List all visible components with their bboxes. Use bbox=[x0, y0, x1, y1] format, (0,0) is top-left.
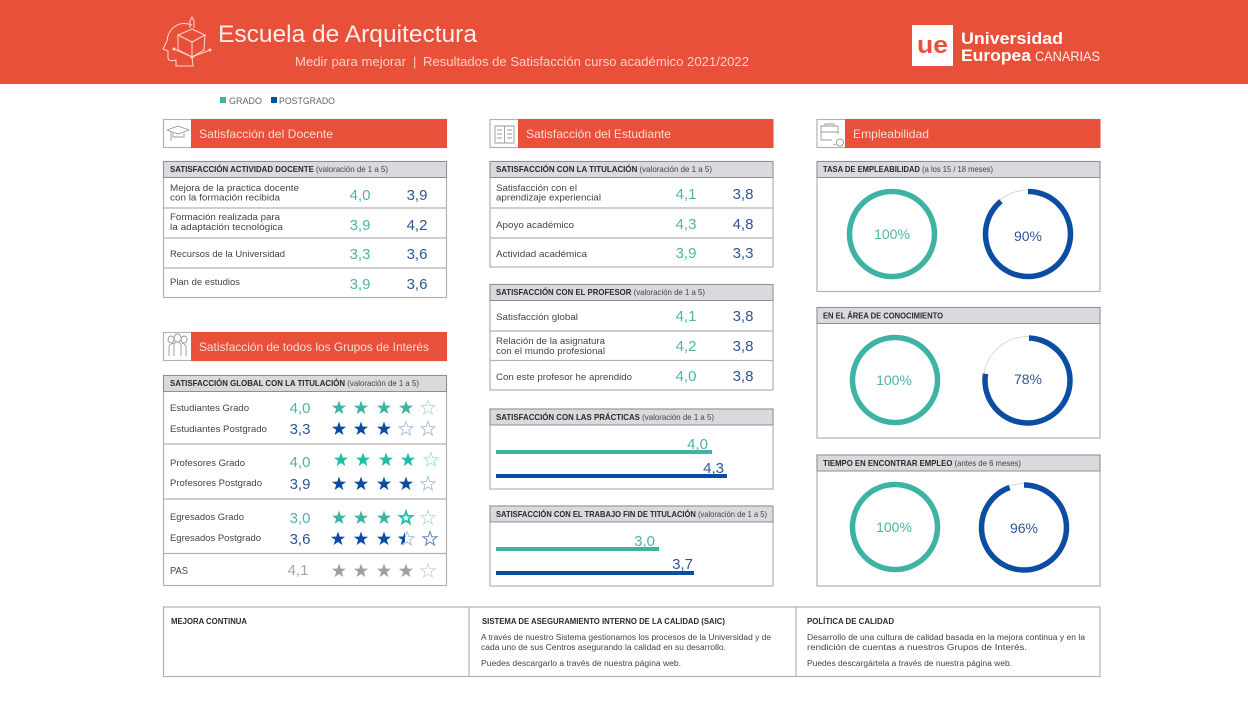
donut: 96% postgrado bbox=[980, 484, 1068, 572]
row: Profesores Grado bbox=[170, 452, 438, 471]
table: satisfacción actividad docente: con la formación recibida bbox=[170, 192, 281, 204]
donut: 90% postgrado bbox=[984, 190, 1072, 278]
subtitle: Resultados de Satisfacción curso académico 2021/2022 bbox=[423, 54, 749, 69]
row: Estudiantes Grado bbox=[170, 400, 435, 417]
row: Profesores Postgrado bbox=[170, 476, 435, 493]
table: satisfacción con el profesor bbox=[490, 284, 773, 390]
icon: briefcase with magnifier bbox=[821, 124, 843, 146]
donut: 100% grado: 100% bbox=[874, 226, 910, 242]
icon: head with cube bbox=[163, 17, 211, 66]
table: satisfacción con el profesor: 3,8 bbox=[733, 368, 753, 385]
panel heading: Empleabilidad bbox=[817, 119, 1100, 148]
table: satisfacción actividad docente: 4,0 bbox=[350, 187, 370, 204]
table: satisfacción con la titulación: 4,8 bbox=[733, 216, 753, 233]
logo: Universidad Europea Canarias: ue bbox=[917, 32, 948, 59]
panel heading: Satisfacción del Docente: Satisfacción del Docente bbox=[199, 127, 333, 141]
subtitle: Medir para mejorar bbox=[295, 54, 407, 69]
row: Estudiantes Postgrado: Estudiantes Postgrado bbox=[170, 424, 267, 435]
table: satisfacción con el profesor: 4,0 bbox=[676, 368, 696, 385]
table: satisfacción actividad docente: 3,9 bbox=[407, 187, 427, 204]
block: política de calidad: rendición de cuentas a nuestros Grupos de Interés. bbox=[807, 643, 1027, 652]
table: satisfacción actividad docente: Mejora de la practica docente bbox=[170, 183, 299, 194]
header banner bbox=[0, 0, 1248, 84]
subtitle: | bbox=[413, 54, 416, 69]
panel: tiempo en encontrar empleo bbox=[817, 455, 1100, 586]
panel: en el área de conocimiento: EN EL ÁREA DE CONOCIMIENTO bbox=[823, 310, 943, 320]
table: satisfacción actividad docente: Recursos de la Universidad bbox=[170, 249, 285, 260]
panel: tasa de empleabilidad: TASA DE EMPLEABILIDAD (a los 15 / 18 meses) bbox=[823, 164, 993, 174]
legend: POSTGRADO bbox=[279, 96, 335, 106]
table: satisfacción con el profesor: 4,2 bbox=[676, 338, 696, 355]
row: Profesores Grado: 4,0 bbox=[290, 454, 310, 471]
table: satisfacción actividad docente: Plan de estudios bbox=[170, 277, 240, 288]
block: sistema de aseguramiento interno: cada uno de sus Centros asegurando la calidad en su desarrollo. bbox=[481, 643, 726, 652]
chart: satisfacción con las prácticas: 4,3 bbox=[703, 460, 724, 477]
table: satisfacción actividad docente: 3,6 bbox=[407, 276, 427, 293]
logo: Universidad Europea Canarias: Europea bbox=[961, 46, 1032, 65]
chart: satisfacción con el trabajo fin de titulación: 3,0 bbox=[634, 533, 655, 550]
row: Profesores Postgrado: 3,9 bbox=[290, 476, 310, 493]
row: Egresados Grado: Egresados Grado bbox=[170, 512, 244, 523]
donut: 100% grado: 100% bbox=[876, 519, 912, 535]
panel: tasa de empleabilidad bbox=[817, 162, 1100, 292]
row: Egresados Grado: 3,0 bbox=[290, 510, 310, 527]
title: Escuela de Arquitectura bbox=[218, 21, 478, 48]
block: sistema de aseguramiento interno: SISTEMA DE ASEGURAMIENTO INTERNO DE LA CALIDAD (SAIC) bbox=[482, 617, 725, 626]
chart: satisfacción con el trabajo fin de titulación bbox=[490, 506, 773, 586]
logo: Universidad Europea Canarias: CANARIAS bbox=[1035, 48, 1100, 64]
footer panel bbox=[164, 607, 1100, 676]
table: satisfacción con el profesor: con el mundo profesional bbox=[496, 346, 605, 357]
chart: satisfacción con las prácticas: SATISFACCIÓN CON LAS PRÁCTICAS (valoración de 1 a 5) bbox=[496, 411, 714, 422]
panel heading: Empleabilidad: Empleabilidad bbox=[853, 127, 929, 141]
row: Estudiantes Grado: 4,0 bbox=[290, 400, 310, 417]
donut: 90% postgrado: 90% bbox=[1014, 228, 1042, 244]
chart: satisfacción con el trabajo fin de titulación: 3,7 bbox=[672, 556, 693, 573]
table: satisfacción actividad docente: SATISFACCIÓN ACTIVIDAD DOCENTE (valoración de 1 a 5) bbox=[170, 163, 388, 174]
table: satisfacción con la titulación: 3,9 bbox=[676, 245, 696, 262]
table: satisfacción con la titulación: Apoyo académico bbox=[496, 220, 574, 231]
legend bbox=[220, 96, 335, 106]
table: satisfacción actividad docente: 3,9 bbox=[350, 217, 370, 234]
table: satisfacción con el profesor: SATISFACCIÓN CON EL PROFESOR (valoración de 1 a 5) bbox=[496, 286, 705, 297]
table: satisfacción actividad docente: la adaptación tecnológica bbox=[170, 222, 284, 233]
panel: en el área de conocimiento bbox=[817, 308, 1100, 438]
table: satisfacción con el profesor: 3,8 bbox=[733, 308, 753, 325]
row: PAS bbox=[170, 562, 435, 579]
table: satisfacción con la titulación: 3,8 bbox=[733, 186, 753, 203]
chart: satisfacción con las prácticas: 4,0 bbox=[687, 436, 708, 453]
table: satisfacción global con la titulación: SATISFACCIÓN GLOBAL CON LA TITULACIÓN (valoración de 1 a 5) bbox=[170, 377, 419, 388]
row: Estudiantes Postgrado: 3,3 bbox=[290, 421, 310, 438]
table: satisfacción con la titulación: 4,1 bbox=[676, 186, 696, 203]
block: sistema de aseguramiento interno bbox=[481, 617, 772, 668]
table: satisfacción con la titulación: 4,3 bbox=[676, 216, 696, 233]
table: satisfacción actividad docente: 3,3 bbox=[350, 246, 370, 263]
table: satisfacción actividad docente bbox=[164, 162, 446, 298]
table: satisfacción actividad docente: 4,2 bbox=[407, 217, 427, 234]
panel heading: Satisfacción del Estudiante bbox=[490, 119, 774, 148]
table: satisfacción con el profesor: Con este profesor he aprendido bbox=[496, 372, 632, 383]
block: mejora continua: MEJORA CONTINUA bbox=[171, 617, 247, 626]
table: satisfacción actividad docente: Formación realizada para bbox=[170, 212, 281, 223]
chart: satisfacción con las prácticas bbox=[490, 409, 773, 489]
row: Egresados Postgrado: Egresados Postgrado bbox=[170, 533, 261, 544]
chart: satisfacción con el trabajo fin de titulación: SATISFACCIÓN CON EL TRABAJO FIN DE TITULACIÓN (valoración de 1 a 5) bbox=[496, 508, 767, 519]
icon: open book bbox=[495, 126, 514, 143]
panel heading: Satisfacción de todos los Grupos de Interés: Satisfacción de todos los Grupos de Interés bbox=[199, 340, 429, 354]
table: satisfacción con el profesor: Satisfacción global bbox=[496, 312, 578, 323]
table: satisfacción actividad docente: 3,9 bbox=[350, 276, 370, 293]
panel heading: Satisfacción de todos los Grupos de Interés bbox=[164, 332, 447, 361]
table: satisfacción con la titulación: 3,3 bbox=[733, 245, 753, 262]
table: satisfacción actividad docente: 3,6 bbox=[407, 246, 427, 263]
donut: 78% postgrado bbox=[984, 336, 1072, 424]
row: Egresados Postgrado bbox=[170, 531, 437, 548]
table: satisfacción global con la titulación bbox=[164, 376, 446, 586]
panel heading: Satisfacción del Estudiante: Satisfacción del Estudiante bbox=[526, 127, 671, 141]
row: PAS: PAS bbox=[170, 565, 188, 577]
block: política de calidad: Desarrollo de una cultura de calidad basada en la mejora continua y en la bbox=[807, 633, 1086, 642]
donut: 96% postgrado: 96% bbox=[1010, 520, 1038, 536]
panel heading: Satisfacción del Docente bbox=[164, 119, 447, 148]
table: satisfacción con la titulación: Actividad académica bbox=[496, 249, 588, 260]
panel: tiempo en encontrar empleo: TIEMPO EN ENCONTRAR EMPLEO (antes de 6 meses) bbox=[823, 458, 1021, 468]
icon: graduation cap bbox=[167, 126, 189, 141]
legend: GRADO bbox=[229, 96, 262, 106]
table: satisfacción con la titulación: Satisfacción con el bbox=[496, 183, 577, 194]
row: Profesores Grado: Profesores Grado bbox=[170, 458, 245, 469]
table: satisfacción con el profesor: 4,1 bbox=[676, 308, 696, 325]
table: satisfacción con la titulación: aprendizaje experiencial bbox=[496, 192, 601, 204]
block: política de calidad: Puedes descargártela a través de nuestra página web. bbox=[807, 659, 1012, 668]
row: Estudiantes Grado: Estudiantes Grado bbox=[170, 403, 249, 414]
row: Egresados Grado bbox=[170, 510, 435, 527]
donut: 100% grado bbox=[852, 484, 938, 570]
block: sistema de aseguramiento interno: Puedes descargarlo a través de nuestra página web. bbox=[481, 659, 681, 668]
logo: Universidad Europea Canarias bbox=[912, 25, 1100, 66]
row: Estudiantes Postgrado bbox=[170, 421, 435, 438]
table: satisfacción con la titulación bbox=[490, 162, 773, 267]
table: satisfacción con la titulación: SATISFACCIÓN CON LA TITULACIÓN (valoración de 1 a 5) bbox=[496, 163, 712, 174]
table: satisfacción con el profesor: Relación de la asignatura bbox=[496, 336, 606, 347]
block: política de calidad: POLÍTICA DE CALIDAD bbox=[807, 617, 894, 626]
donut: 100% grado: 100% bbox=[876, 372, 912, 388]
donut: 100% grado bbox=[852, 338, 938, 422]
row: Profesores Postgrado: Profesores Postgrado bbox=[170, 478, 262, 489]
logo: Universidad Europea Canarias: Universidad bbox=[961, 29, 1063, 48]
row: Egresados Postgrado: 3,6 bbox=[290, 531, 310, 548]
table: satisfacción con el profesor: 3,8 bbox=[733, 338, 753, 355]
donut: 100% grado bbox=[850, 192, 934, 276]
block: política de calidad bbox=[807, 617, 1086, 668]
block: sistema de aseguramiento interno: A través de nuestro Sistema gestionamos los procesos de la Universidad y de bbox=[481, 633, 772, 642]
icon: people bbox=[168, 334, 187, 356]
row: PAS: 4,1 bbox=[288, 562, 308, 579]
donut: 78% postgrado: 78% bbox=[1014, 371, 1042, 387]
